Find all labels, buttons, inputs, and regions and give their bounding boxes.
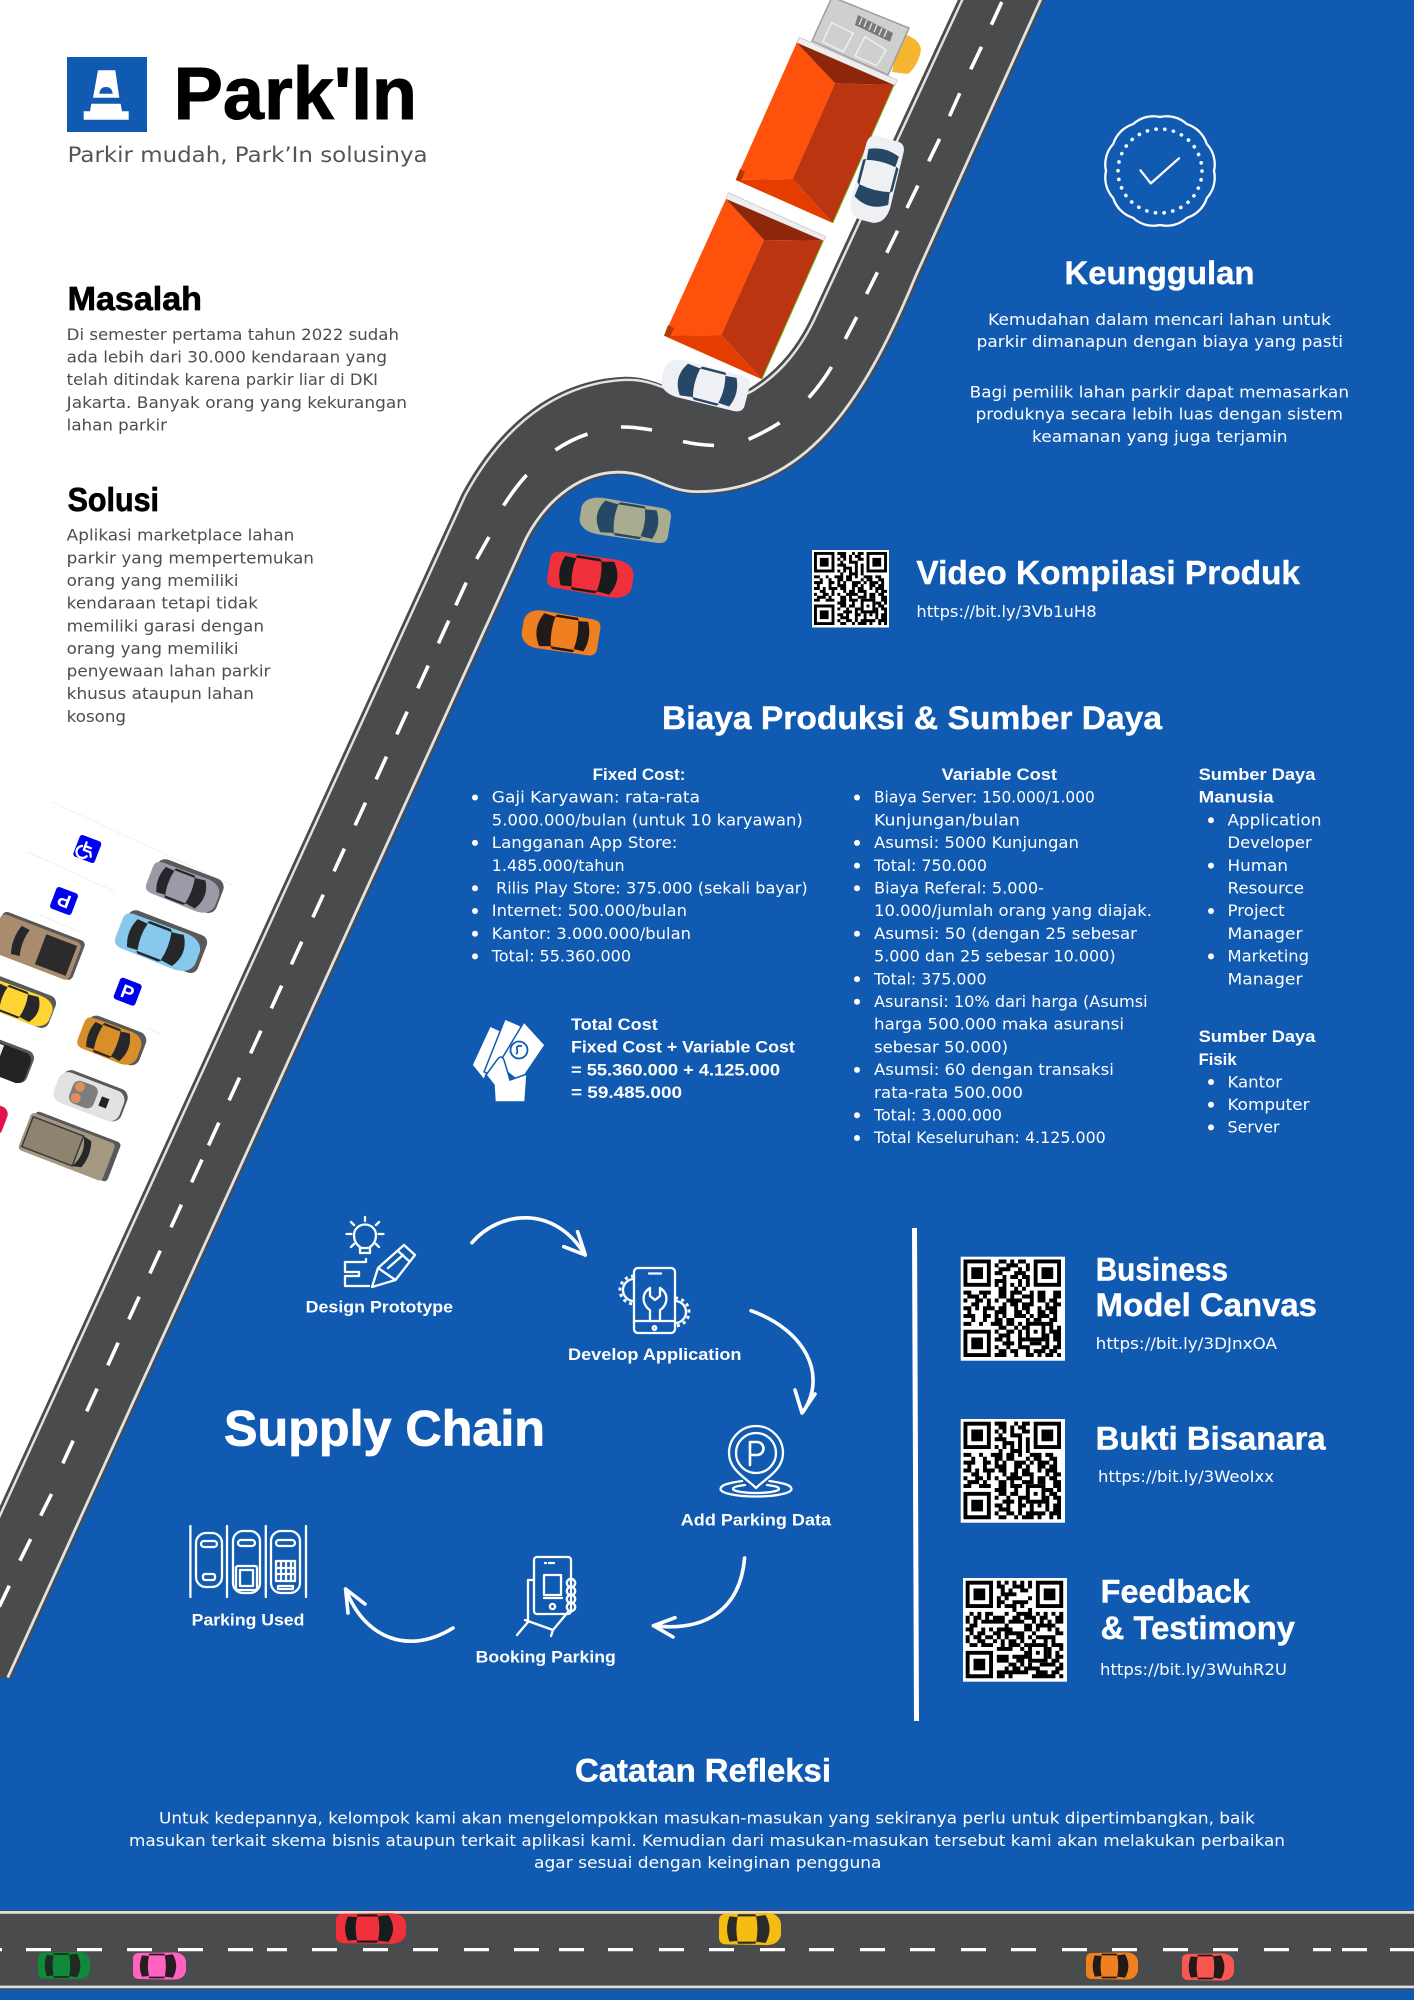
list: fixed cost: Langganan App Store:: [492, 834, 677, 852]
list: sumber daya fisik: [1208, 1074, 1310, 1136]
list: variable cost: Kunjungan/bulan: [874, 811, 1020, 829]
link: business model canvas: https://bit.ly/3DJnxOA: [1096, 1334, 1277, 1353]
arrow: add parking to booking: [654, 1558, 745, 1637]
car: white sedan lower: [658, 356, 752, 414]
list: sumber daya manusia: Human: [1228, 857, 1288, 875]
text: keunggulan: parkir dimanapun dengan biaya yang pasti: [977, 332, 1343, 351]
car: beige truck: [18, 1109, 122, 1183]
label: design prototype: Design Prototype: [306, 1299, 453, 1317]
panel: video kompilasi produk: [812, 550, 1301, 628]
building: grey garage: [812, 0, 921, 75]
car: taxi: [0, 972, 58, 1031]
text: masalah: Di semester pertama tahun 2022 sudah: [67, 325, 399, 344]
list: fixed cost: 5.000.000/bulan (untuk 10 karyawan): [492, 811, 803, 829]
label: develop application: Develop Application: [568, 1346, 742, 1364]
car: olive: [578, 495, 672, 545]
qr code: bukti bisanara: [961, 1419, 1065, 1523]
tagline: Parkir mudah, Park’In solusinya: [68, 143, 428, 167]
list: sumber daya fisik: Server: [1228, 1118, 1280, 1136]
list: variable cost: [854, 789, 1152, 1147]
list: variable cost: Asuransi: 10% dari harga (Asumsi: [874, 993, 1148, 1011]
heading: feedback and testimony: & Testimony: [1101, 1610, 1295, 1646]
text: masalah: telah ditindak karena parkir liar di DKI: [67, 370, 378, 389]
qr code: feedback: [963, 1578, 1067, 1682]
arrow: design to develop: [472, 1218, 585, 1255]
qr code: business model canvas: [961, 1257, 1065, 1361]
car: orange: [1086, 1952, 1138, 1980]
icon: develop application: [620, 1268, 689, 1333]
list: sumber daya manusia: Manager: [1228, 925, 1303, 943]
text: solusi: kendaraan tetapi tidak: [67, 594, 259, 612]
list: fixed cost: Gaji Karyawan: rata-rata: [492, 789, 700, 807]
car: yellow: [719, 1913, 781, 1945]
list: variable cost: rata-rata 500.000: [874, 1084, 1023, 1102]
bottom road: [0, 1910, 1414, 1990]
text: solusi: orang yang memiliki: [67, 571, 238, 590]
list: sumber daya manusia: Application: [1228, 811, 1322, 829]
heading: bukti bisanara: Bukti Bisanara: [1096, 1420, 1326, 1456]
text: keunggulan: Kemudahan dalam mencari lahan untuk: [988, 310, 1332, 329]
text: total cost: [571, 1016, 795, 1102]
car: light blue suv: [112, 906, 209, 977]
heading: fixed cost: Fixed Cost:: [593, 766, 685, 784]
panel: fixed cost: [472, 766, 808, 966]
sign: parking P: P: [117, 981, 137, 1005]
diagonal road: [0, 0, 1045, 1679]
car: red: [546, 549, 636, 601]
heading: video: Video Kompilasi Produk: [916, 554, 1301, 591]
building: orange roof 2: [664, 193, 826, 379]
list: variable cost: 5.000 dan 25 sebesar 10.000): [874, 948, 1116, 966]
car: white convertible: [51, 1066, 130, 1125]
icon: design prototype: [345, 1217, 415, 1287]
building: orange roof 1: [736, 37, 897, 223]
heading: sumber daya manusia: [1199, 766, 1316, 807]
car: white sedan upper: [847, 134, 907, 226]
text: solusi: khusus ataupun lahan: [67, 684, 254, 703]
text: total cost: Fixed Cost + Variable Cost: [571, 1039, 795, 1057]
panel: supply chain: [190, 1217, 832, 1667]
parking lot: [0, 802, 232, 1183]
list: variable cost: Biaya Server: 150.000/1.000: [874, 789, 1095, 807]
panel: sumber daya: [1199, 766, 1322, 1136]
text: solusi: penyewaan lahan parkir: [67, 662, 271, 680]
heading: sumber daya fisik: Sumber Daya: [1199, 1028, 1316, 1046]
heading: solusi: Solusi: [68, 481, 159, 518]
panel: feedback and testimony: [963, 1574, 1295, 1682]
heading: sumber daya fisik: [1199, 1028, 1316, 1069]
list: variable cost: Total: 375.000: [873, 970, 987, 988]
heading: sumber daya manusia: Sumber Daya: [1199, 766, 1316, 784]
text: total cost: = 55.360.000 + 4.125.000: [571, 1062, 780, 1080]
heading: feedback and testimony: [1101, 1574, 1295, 1646]
list: sumber daya manusia: Project: [1228, 902, 1285, 920]
link: video: https://bit.ly/3Vb1uH8: [916, 602, 1097, 621]
text: solusi: kosong: [67, 707, 126, 726]
icon: verified badge: [1105, 116, 1215, 226]
text: masalah: ada lebih dari 30.000 kendaraan yang: [67, 348, 387, 367]
text: solusi: memiliki garasi dengan: [67, 616, 264, 636]
link: bukti bisanara: https://bit.ly/3WeoIxx: [1098, 1467, 1274, 1486]
heading: keunggulan: Keunggulan: [1064, 255, 1254, 291]
panel: masalah: [66, 280, 407, 434]
icon: parked cars: [190, 1526, 306, 1597]
text: keunggulan: keamanan yang juga terjamin: [1032, 427, 1288, 446]
list: variable cost: Biaya Referal: 5.000-: [874, 880, 1044, 898]
text: solusi: orang yang memiliki: [67, 639, 238, 658]
title: Park'In: [174, 52, 417, 135]
heading: biaya produksi: Biaya Produksi & Sumber Daya: [662, 700, 1162, 736]
panel: business model canvas: [961, 1252, 1317, 1361]
list: fixed cost: Rilis Play Store: 375.000 (sekali bayar): [496, 880, 808, 898]
heading: business model canvas: [1096, 1252, 1317, 1323]
sign: parking P upside down: [49, 886, 79, 916]
list: fixed cost: Kantor: 3.000.000/bulan: [492, 925, 691, 943]
text: solusi: parkir yang mempertemukan: [67, 548, 314, 568]
panel: solusi: [67, 481, 314, 726]
text: catatan refleksi: Untuk kedepannya, kelompok kami akan mengelompokkan masukan-masukan yang sekiranya perlu untuk dipertimbangkan, baik: [159, 1808, 1255, 1827]
list: variable cost: Asumsi: 50 (dengan 25 sebesar: [874, 925, 1138, 943]
heading: supply chain: Supply Chain: [224, 1401, 545, 1457]
sign: parking P upside down: P: [55, 887, 74, 912]
list: fixed cost: 1.485.000/tahun: [492, 857, 625, 875]
heading: sumber daya fisik: Fisik: [1199, 1051, 1237, 1069]
text: catatan refleksi: [129, 1808, 1285, 1872]
label: add parking data: Add Parking Data: [681, 1512, 832, 1530]
text: masalah: Jakarta. Banyak orang yang kekurangan: [66, 393, 407, 412]
label: parking used: Parking Used: [192, 1612, 304, 1630]
panel: bukti bisanara: [961, 1419, 1326, 1523]
car: amber sports: [75, 1012, 149, 1070]
list: sumber daya fisik: Kantor: [1228, 1074, 1283, 1092]
list: variable cost: sebesar 50.000): [874, 1038, 1008, 1056]
car: brown pickup: [0, 910, 86, 982]
text: solusi: Aplikasi marketplace lahan: [67, 526, 294, 544]
list: sumber daya manusia: Manager: [1228, 970, 1303, 988]
car: grey: [144, 855, 226, 918]
panel: variable cost: [854, 766, 1152, 1147]
text: total cost: Total Cost: [571, 1016, 658, 1034]
heading: business model canvas: Business: [1096, 1252, 1228, 1288]
cars on the road: [658, 134, 907, 414]
list: variable cost: 10.000/jumlah orang yang diajak.: [874, 902, 1152, 920]
heading: business model canvas: Model Canvas: [1096, 1287, 1317, 1323]
list: fixed cost: Total: 55.360.000: [491, 948, 631, 966]
list: sumber daya manusia: Resource: [1228, 880, 1304, 898]
list: variable cost: Total: 750.000: [873, 857, 987, 875]
car: pink: [133, 1952, 186, 1980]
text: total cost: = 59.485.000: [571, 1084, 682, 1102]
list: variable cost: Asumsi: 5000 Kunjungan: [874, 834, 1079, 852]
qr code: video: [812, 550, 889, 628]
list: fixed cost: Internet: 500.000/bulan: [492, 902, 687, 920]
list: sumber daya manusia: [1208, 811, 1322, 988]
text: keunggulan: produknya secara lebih luas dengan sistem: [976, 404, 1343, 424]
text: catatan refleksi: masukan terkait skema bisnis ataupun terkait aplikasi kami. Kemudian dari masukan-masukan tersebut kami akan melakukan perbaikan: [129, 1831, 1285, 1850]
heading: feedback and testimony: Feedback: [1101, 1574, 1250, 1610]
panel: keunggulan: [970, 116, 1349, 446]
cars parked on blue area: [520, 495, 672, 658]
text: masalah: lahan parkir: [67, 415, 167, 434]
list: variable cost: Total Keseluruhan: 4.125.000: [873, 1129, 1106, 1147]
sign: parking P: [113, 977, 143, 1007]
list: sumber daya fisik: Komputer: [1228, 1096, 1310, 1114]
buildings: [664, 0, 921, 379]
car: crimson: [0, 1084, 10, 1138]
heading: catatan refleksi: Catatan Refleksi: [575, 1753, 831, 1789]
divider: [914, 1228, 916, 1721]
icon: parking pin: [720, 1426, 792, 1496]
list: sumber daya manusia: Marketing: [1228, 948, 1309, 966]
car: green: [38, 1952, 90, 1979]
icon: money in hand: [472, 1019, 545, 1102]
arrow: develop to add parking: [751, 1311, 815, 1413]
text: catatan refleksi: agar sesuai dengan keinginan pengguna: [534, 1853, 882, 1872]
list: variable cost: harga 500.000 maka asuransi: [874, 1016, 1124, 1034]
car: red: [336, 1913, 406, 1944]
text: solusi: [67, 526, 314, 726]
car: police: [0, 1028, 36, 1086]
car: coral: [1182, 1953, 1234, 1981]
arrow: booking to parking used: [346, 1589, 453, 1641]
list: fixed cost: [472, 789, 808, 966]
label: booking parking: Booking Parking: [476, 1649, 616, 1667]
list: variable cost: Asumsi: 60 dengan transaksi: [874, 1061, 1114, 1079]
list: sumber daya manusia: Developer: [1228, 834, 1312, 852]
text: masalah: [66, 325, 407, 434]
white area beside road: [0, 0, 963, 1555]
car: orange: [520, 608, 602, 658]
list: variable cost: Total: 3.000.000: [873, 1106, 1002, 1124]
link: feedback: https://bit.ly/3WuhR2U: [1100, 1660, 1287, 1679]
logo: [67, 57, 147, 132]
panel: total cost: [472, 1016, 795, 1102]
heading: sumber daya manusia: Manusia: [1199, 789, 1275, 807]
icon: phone in hand: [517, 1557, 575, 1636]
heading: variable cost: Variable Cost: [942, 766, 1058, 784]
panel: catatan refleksi: [129, 1753, 1285, 1872]
text: keunggulan: Bagi pemilik lahan parkir dapat memasarkan: [970, 383, 1349, 402]
heading: masalah: Masalah: [68, 280, 202, 317]
text: keunggulan: [970, 310, 1349, 446]
sign: wheelchair parking: [72, 834, 102, 864]
